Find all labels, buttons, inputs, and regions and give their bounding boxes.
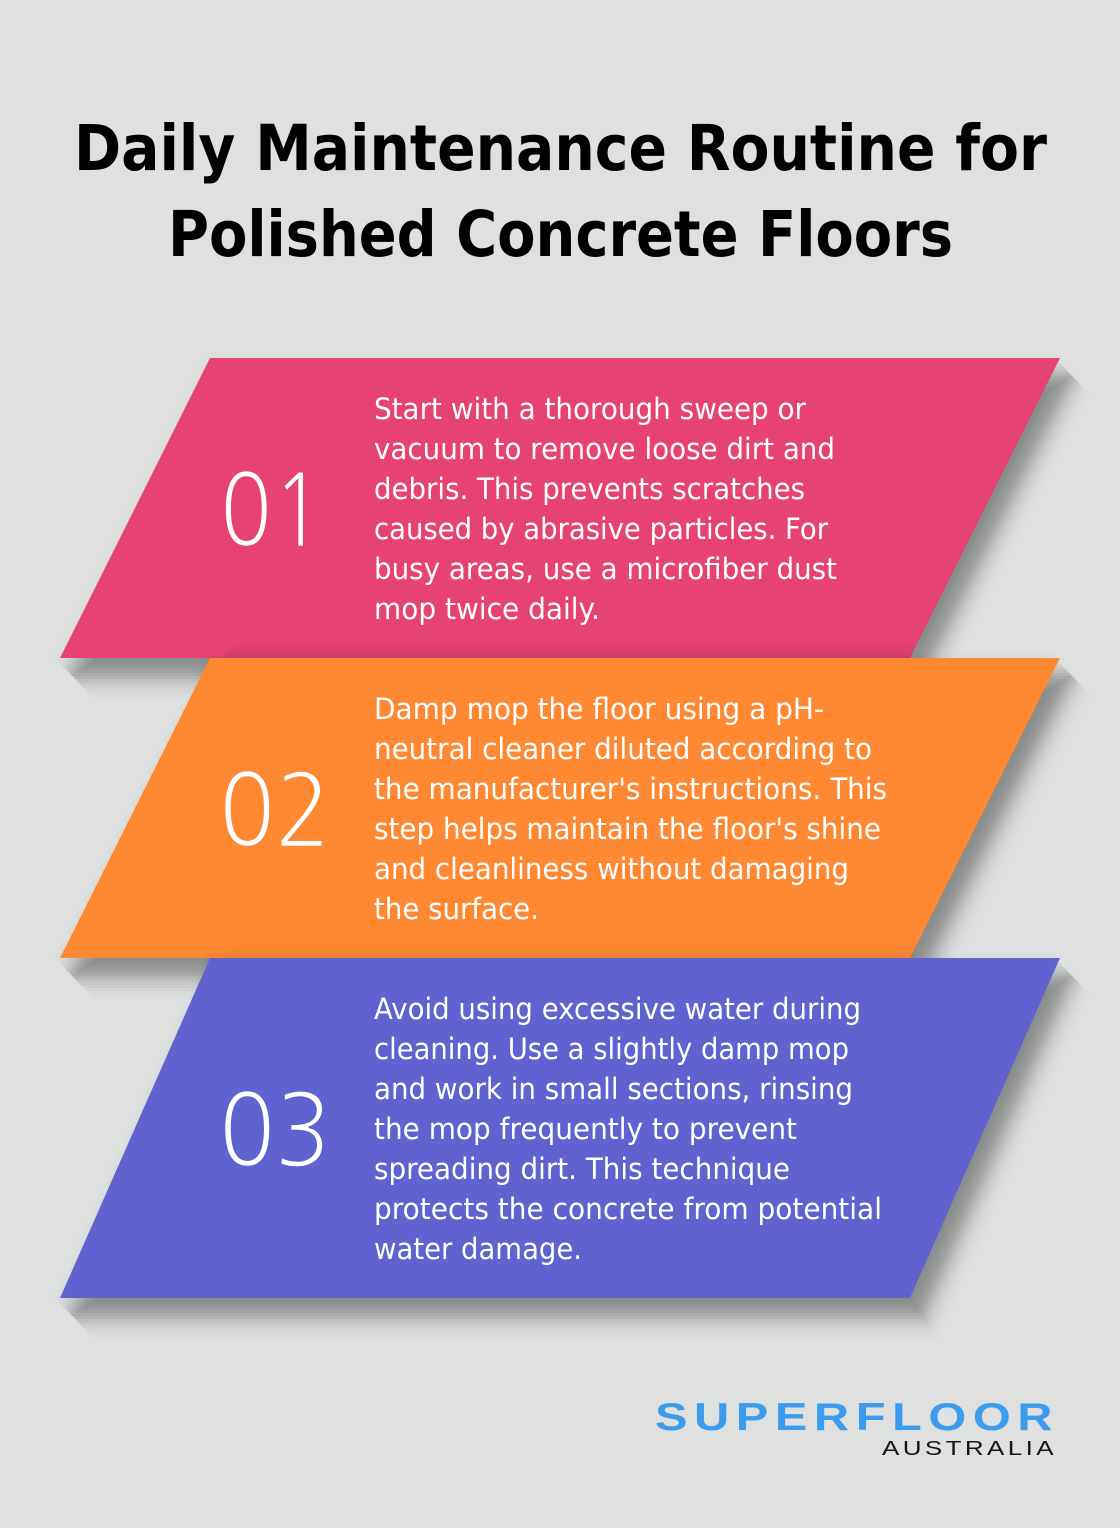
text: step 02: the surface. (374, 892, 539, 926)
number 01: 01 (220, 461, 324, 561)
logo: Superfloor Australia: SUPERFLOOR (655, 1396, 1052, 1439)
text: step 02: Damp mop the floor using a pH- (374, 692, 824, 726)
text: step 03: the mop frequently to prevent (374, 1112, 797, 1146)
text: step 02 (374, 692, 887, 926)
number 03: 03 (219, 1081, 331, 1181)
text: step 01: vacuum to remove loose dirt and (374, 432, 835, 466)
text: step 01: debris. This prevents scratches (374, 472, 805, 506)
text: step 03 (374, 992, 882, 1266)
text: step 03: water damage. (374, 1232, 582, 1266)
text: step 02: neutral cleaner diluted according to (374, 732, 872, 766)
text: step 01: mop twice daily. (374, 592, 600, 626)
text: step 02: step helps maintain the floor's shine (374, 812, 881, 846)
number 02: 02 (219, 761, 331, 861)
text: step 03: cleaning. Use a slightly damp mop (374, 1032, 849, 1066)
panel: step 01 (33, 352, 1111, 700)
panel: step 02 (33, 652, 1111, 1000)
text: step 03: protects the concrete from potential (374, 1192, 882, 1226)
text: step 01 (374, 392, 837, 626)
logo: Superfloor Australia (655, 1396, 1054, 1459)
text: step 03: and work in small sections, rinsing (374, 1072, 853, 1106)
panel: step 03 (35, 952, 1109, 1340)
text: step 03: Avoid using excessive water during (374, 992, 861, 1026)
text: step 01: Start with a thorough sweep or (374, 392, 806, 426)
text: step 02: the manufacturer's instructions. This (374, 772, 887, 806)
title: Polished Concrete Floors (168, 197, 953, 271)
logo: Superfloor Australia: AUSTRALIA (882, 1437, 1054, 1459)
text: step 03: spreading dirt. This technique (374, 1152, 790, 1186)
text: step 02: and cleanliness without damaging (374, 852, 849, 886)
text: step 01: busy areas, use a microfiber dust (374, 552, 837, 586)
title (74, 111, 1048, 271)
text: step 01: caused by abrasive particles. For (374, 512, 828, 546)
